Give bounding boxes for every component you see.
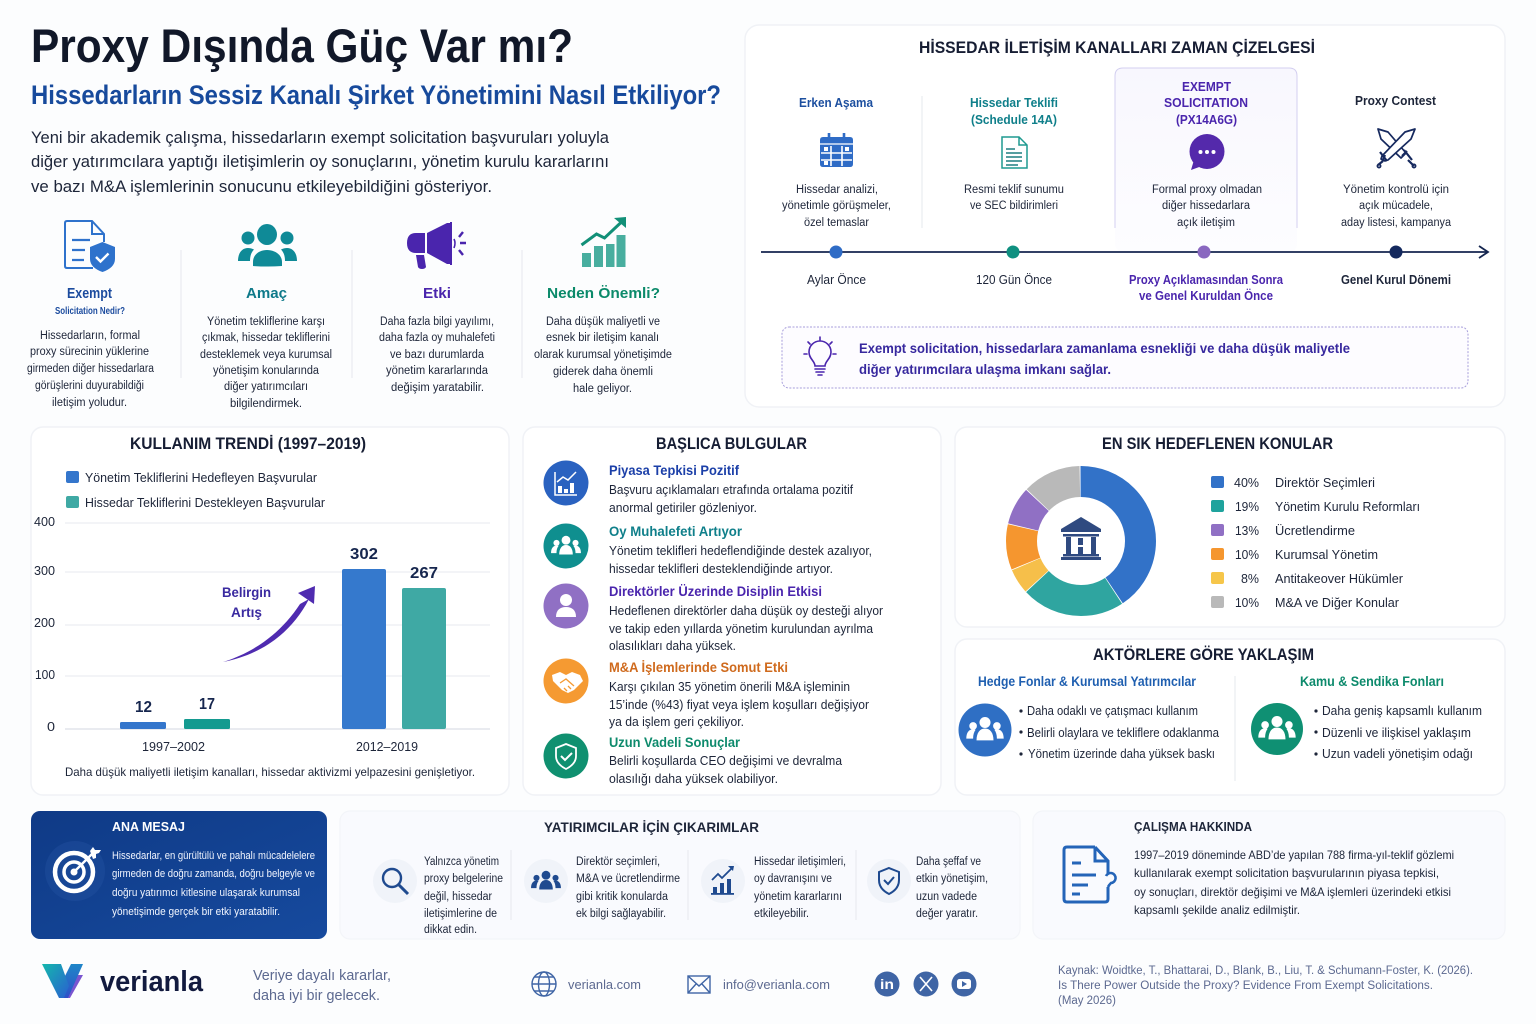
icon: shield [867,859,911,903]
implication: voting behaviour: Hissedar iletişimleri, [754,856,846,868]
stage: proxy contest: Yönetim kontrolü için [1343,184,1449,196]
stage: exempt solicitation: açık iletişim [1177,217,1235,229]
source citation: Kaynak: Woidtke, T., Bhattarai, D., Blank, B., Liu, T. & Schumann-Foster, K. (2026). [1058,965,1473,977]
finding: M&A impact: Karşı çıkılan 35 yönetim önerili M&A işleminin [609,680,850,694]
implication: key topics [524,856,680,920]
finding: vote dissent [544,523,872,576]
finding: long term: Belirli koşullarda CEO değişimi ve devralma [609,754,842,768]
implication: transparent governance: Daha şeffaf ve [916,856,981,868]
implication: voting behaviour [701,856,846,920]
description: Daha düşük maliyetli ve [546,316,660,328]
highlighted stage box [1115,68,1297,252]
description: giderek daha önemli [553,366,653,378]
panel: approach by actors [955,639,1505,795]
description: çıkmak, hissedar tekliflerini [202,332,330,344]
hedge funds column: Daha odaklı ve çatışmacı kullanım [1027,704,1198,718]
chart heading: KULLANIM TRENDİ (1997–2019) [130,435,366,453]
stage: exempt solicitation: diğer hissedarlara [1162,200,1251,212]
heading: Exempt [67,285,112,302]
finding: director discipline: Direktörler Üzerinde Disiplin Etkisi [609,583,822,599]
icon: people blue [958,704,1012,756]
implication: proxy documents: Yalnızca yönetim [424,856,499,868]
donut legend: 19% [1235,500,1259,514]
implication: transparent governance [867,856,988,920]
donut legend: Ücretlendirme [1275,524,1355,538]
intro paragraph: Yeni bir akademik çalışma, hissedarların exempt solicitation başvuruları yoluyla [31,128,610,147]
bar chart: 2012–2019 [356,740,418,754]
icon: people [238,224,297,266]
subtitle: Hissedarların Sessiz Kanalı Şirket Yönetimini Nasıl Etkiliyor? [31,80,721,110]
panel: about the study [1033,811,1505,939]
panel: key message [31,811,327,939]
donut legend: 10% [1235,596,1259,610]
implication: voting behaviour: etkileyebilir. [754,908,809,920]
hedge funds column [958,674,1219,761]
intro paragraph [31,128,610,196]
bar chart: 400 [34,515,55,529]
panel: investor implications [340,811,1020,939]
description: Daha fazla bilgi yayılımı, [380,316,494,328]
public and union funds column: Daha geniş kapsamlı kullanım [1322,704,1482,718]
column: exempt solicitation: Solicitation Nedir? [55,306,125,317]
stage: erken aşama: Erken Aşama [799,96,874,110]
stage: erken aşama [782,96,891,229]
description: görüşlerini duyurabildiği [35,380,144,392]
chart legend: Hissedar Tekliflerini Destekleyen Başvurular [85,496,325,510]
callout: diğer yatırımcılara ulaşma imkanı sağlar. [859,361,1111,377]
finding: vote dissent: hissedar teklifleri desteklendiğinde artıyor. [609,562,833,576]
description: bilgilendirmek. [230,398,302,410]
donut legend: 8% [1241,572,1259,586]
footer website [532,972,641,996]
description: yönetim kararlarında [386,365,489,377]
donut legend: 40% [1234,476,1259,490]
implication: transparent governance: uzun vadede [916,891,977,903]
social icons: in [880,976,894,992]
implication: voting behaviour: oy davranışını ve [754,873,832,885]
description: diğer yatırımcıları [224,381,308,393]
icon: institution building [1061,517,1101,560]
description: Hissedarların, formal [40,330,140,342]
finding: market reaction: Piyasa Tepkisi Pozitif [609,462,739,478]
panel: most targeted topics [955,427,1505,627]
bar chart: 1997–2002 [142,740,205,754]
heading: Amaç [246,285,287,302]
description [379,316,495,394]
bar chart: 200 [34,616,55,630]
finding: long term: olasılığı daha yüksek olabiliyor. [609,772,778,786]
panel: about the study: kapsamlı şekilde analiz edilmiştir. [1134,903,1300,917]
icon: growth bars [701,859,745,903]
bar chart: 12 [135,699,152,716]
donut legend: Antitakeover Hükümler [1275,572,1403,586]
description [27,330,155,409]
implication: key topics: Direktör seçimleri, [576,856,660,868]
public and union funds column: Düzenli ve ilişkisel yaklaşım [1322,726,1471,740]
column: amaç [200,224,332,410]
finding: vote dissent: Oy Muhalefeti Artıyor [609,523,743,539]
icon: shield circle [544,734,588,778]
bar chart: 0 [47,720,55,734]
donut legend: Kurumsal Yönetim [1275,548,1378,562]
description: girmeden diğer hissedarlara [27,363,155,375]
stage: proxy contest: açık mücadele, [1359,200,1433,212]
panel: timeline [745,25,1505,407]
chart caption: Daha düşük maliyetli iletişim kanalları, hissedar aktivizmi yelpazesini genişletiyor. [65,765,475,779]
icon: people green [1251,703,1303,755]
finding: director discipline: Hedeflenen direktörler daha düşük oy desteği alıyor [609,604,883,618]
finding: director discipline [544,583,883,653]
implication: key topics: ek bilgi sağlayabilir. [576,908,666,920]
description [200,316,332,410]
timeline time labels: 120 Gün Önce [976,273,1052,287]
description: hale geliyor. [573,383,632,395]
donut legend: 13% [1235,524,1259,538]
bar chart [34,515,490,754]
growth arrow with label [222,584,315,662]
footer email: info@verianla.com [723,977,830,992]
panel: about the study: kullanılarak exempt solicitation başvurularının piyasa tepkisi, [1134,866,1439,880]
icon: people [524,859,568,903]
footer tagline: Veriye dayalı kararlar, [253,968,391,984]
icon: globe [532,972,556,996]
source citation [1058,965,1473,1007]
column: exempt solicitation [27,221,155,409]
footer logo: verianla [100,966,204,998]
callout: Exempt solicitation, hissedarlara zamanlama esnekliği ve daha düşük maliyetle [859,340,1350,356]
stage: hissedar teklifi: (Schedule 14A) [971,113,1057,127]
finding: market reaction: Başvuru açıklamaları etrafında ortalama pozitif [609,483,853,497]
finding: M&A impact: M&A İşlemlerinde Somut Etki [609,659,788,675]
source citation: Is There Power Outside the Proxy? Evidence From Exempt Solicitations. [1058,980,1433,992]
panel: about the study: ÇALIŞMA HAKKINDA [1134,820,1252,834]
public and union funds column: Kamu & Sendika Fonları [1300,674,1444,689]
donut legend: 10% [1235,548,1259,562]
timeline heading: HİSSEDAR İLETİŞİM KANALLARI ZAMAN ÇİZELGESİ [919,39,1315,57]
stage: hissedar teklifi: Hissedar Teklifi [970,96,1058,110]
actors heading: AKTÖRLERE GÖRE YAKLAŞIM [1093,645,1314,664]
description: desteklemek veya kurumsal [200,349,332,361]
column: etki [379,222,495,394]
description: proxy sürecinin yüklerine [30,346,149,358]
implication: proxy documents: iletişimlerine de [424,908,497,920]
stage: exempt solicitation: EXEMPT [1182,80,1231,94]
panel: about the study: 1997–2019 döneminde ABD’de yapılan 788 firma-yıl-teklif gözlemi [1134,848,1454,862]
finding: director discipline: ve takip eden yıllarda yönetim kurulundan ayrılma [609,622,873,636]
stage: exempt solicitation: (PX14A6G) [1176,113,1237,127]
timeline axis arrow [761,246,1488,258]
column: neden önemli [534,217,672,395]
growth arrow with label: Belirgin [222,584,271,600]
icon: speech bubble [1190,134,1224,170]
heading: Neden Önemli? [547,285,660,302]
bar chart: 267 [410,565,438,582]
finding: vote dissent: Yönetim teklifleri hedeflendiğinde destek azalıyor, [609,544,872,558]
description: yönetişim konularında [213,365,320,377]
findings heading: BAŞLICA BULGULAR [656,435,807,453]
implication: proxy documents: değil, hissedar [424,891,492,903]
finding: long term: Uzun Vadeli Sonuçlar [609,734,740,750]
panel: key message: doğru yatırımcı kitlesine ulaşarak kurumsal [112,887,300,899]
footer tagline [253,968,391,1004]
implication: key topics: gibi kritik konularda [576,891,669,903]
finding: long term [544,734,842,786]
implication: proxy documents [373,856,503,936]
growth arrow with label: Artış [231,604,262,620]
stage: hissedar teklifi [964,96,1064,212]
description: Yönetim tekliflerine karşı [207,316,325,328]
timeline marker dots [830,246,1402,258]
stage: erken aşama: yönetimle görüşmeler, [782,200,891,212]
panel: about the study: oy sonuçları, direktör değişimi ve M&A işlemleri üzerindeki etkisi [1134,885,1451,899]
finding: M&A impact: 15’inde (%43) fiyat veya işlem koşulları değişiyor [609,698,869,712]
panel: key message: girmeden de doğru zamanda, doğru belgeyle ve [112,868,315,880]
donut legend: Yönetim Kurulu Reformları [1275,500,1420,514]
hedge funds column: Belirli olaylara ve tekliflere odaklanma [1027,726,1219,740]
description: ve bazı durumlarda [390,349,485,361]
callout [782,327,1468,388]
timeline time labels [807,273,1451,303]
panel: key message: ANA MESAJ [112,820,185,834]
icon: envelope [688,976,710,993]
implication: proxy documents: proxy belgelerine [424,873,503,885]
icon: megaphone [407,222,466,269]
implication: proxy documents: dikkat edin. [424,924,477,936]
icon: crossed swords [1377,129,1416,168]
footer email [688,976,830,993]
implications heading: YATIRIMCILAR İÇİN ÇIKARIMLAR [544,820,759,835]
hedge funds column: Yönetim üzerinde daha yüksek baskı [1028,747,1215,761]
description: olarak kurumsal yönetişimde [534,349,672,361]
bar chart: 300 [34,564,55,578]
icon: calendar [820,133,853,167]
implication: voting behaviour: yönetim kararlarını [754,891,842,903]
intro paragraph: diğer yatırımcılara yaptığı iletişimlerin oy sonuçlarını, yönetim kurulu kararlarını [31,152,609,171]
description: değişim yaratabilir. [391,382,484,394]
footer logo [42,964,204,998]
icon: handshake circle [544,658,588,704]
stage: hissedar teklifi: Resmi teklif sunumu [964,184,1064,196]
donut legend: M&A ve Diğer Konular [1275,596,1399,610]
donut legend: Direktör Seçimleri [1275,476,1375,490]
stage: exempt solicitation [1152,80,1262,229]
finding: director discipline: olasılıkları daha yüksek. [609,639,736,653]
icon: document [1002,137,1027,168]
bar chart: 100 [35,668,55,682]
timeline time labels: Aylar Önce [807,273,866,287]
chart legend: Yönetim Tekliflerini Hedefleyen Başvurular [85,471,317,485]
description: iletişim yoludur. [52,397,127,409]
icon: target [45,841,105,901]
chart legend [66,471,325,510]
finding: market reaction [544,460,853,515]
bar chart: 17 [199,696,215,713]
donut legend [1211,476,1420,610]
bar chart: 302 [350,546,378,563]
stage: hissedar teklifi: ve SEC bildirimleri [970,200,1058,212]
icon: document with shield [65,221,115,272]
implication: key topics: M&A ve ücretlendirme [576,873,680,885]
stage: exempt solicitation: Formal proxy olmadan [1152,184,1262,196]
footer website: verianla.com [568,977,641,992]
icon: chart circle [544,460,588,506]
panel: key message: Hissedarlar, en gürültülü ve pahalı mücadelelere [112,850,315,862]
footer tagline: daha iyi bir gelecek. [253,988,380,1004]
heading: Etki [423,285,451,302]
finding: M&A impact: ya da işlem geri çekiliyor. [609,715,744,729]
icon: growth chart [582,217,626,267]
icon: magnifier [373,859,417,903]
donut chart [1022,482,1140,600]
hedge funds column: Hedge Fonlar & Kurumsal Yatırımcılar [978,674,1197,689]
public and union funds column: Uzun vadeli yönetişim odağı [1322,747,1473,761]
panel: usage trend chart [31,427,509,795]
title: Proxy Dışında Güç Var mı? [31,19,573,72]
timeline time labels: Proxy Açıklamasından Sonra [1129,273,1284,287]
topics heading: EN SIK HEDEFLENEN KONULAR [1102,435,1333,453]
implication: transparent governance: değer yaratır. [916,908,978,920]
panel: key findings [523,427,941,795]
public and union funds column [1251,674,1482,761]
stage: proxy contest [1341,94,1452,229]
panel: key message: yönetişimde gerçek bir etki yaratabilir. [112,906,280,918]
implication: transparent governance: etkin yönetişim, [916,873,988,885]
description: daha fazla oy muhalefeti [379,332,495,344]
icon: person circle [544,584,588,628]
source citation: (May 2026) [1058,995,1116,1007]
icon: people circle [544,524,588,568]
social icons [874,972,976,996]
description [534,316,672,395]
intro paragraph: ve bazı M&A işlemlerinin sonucunu etkileyebildiğini gösteriyor. [31,177,492,196]
timeline time labels: Genel Kurul Dönemi [1341,273,1451,287]
stage: exempt solicitation: SOLICITATION [1164,96,1248,110]
finding: M&A impact [544,658,869,729]
timeline time labels: ve Genel Kuruldan Önce [1139,288,1273,303]
stage: proxy contest: Proxy Contest [1355,94,1437,108]
icon: light bulb [804,337,836,375]
stage: erken aşama: Hissedar analizi, [796,184,878,196]
finding: market reaction: anormal getiriler gözleniyor. [609,501,757,515]
description: esnek bir iletişim kanalı [546,332,659,344]
icon: document with question mark [1064,847,1116,902]
stage: erken aşama: özel temaslar [804,217,869,229]
stage: proxy contest: aday listesi, kampanya [1341,217,1452,229]
